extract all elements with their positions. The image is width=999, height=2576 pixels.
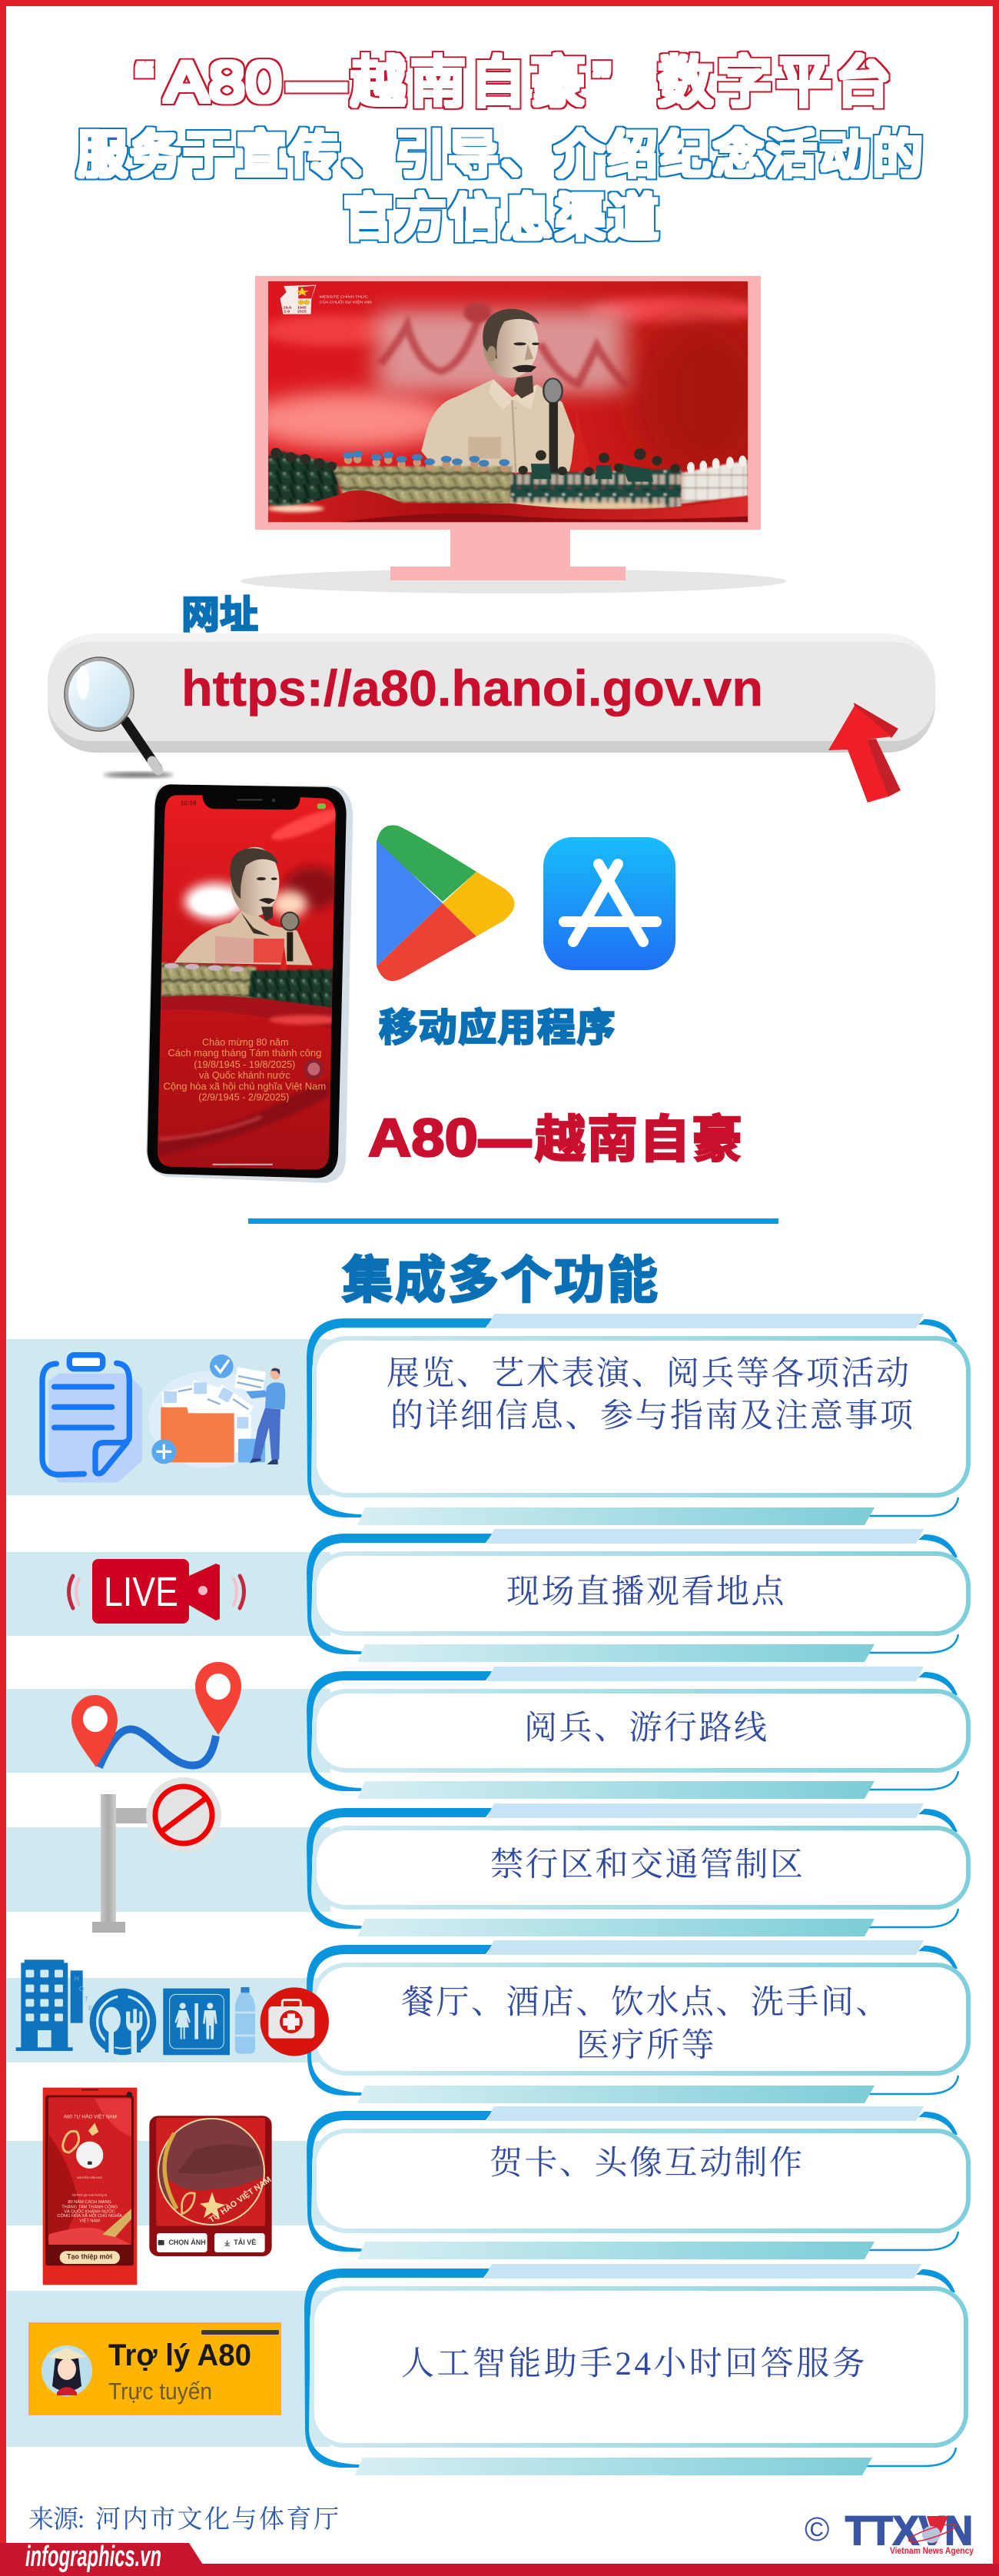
monitor shadow — [241, 569, 786, 593]
panel: feature 4 — [307, 1803, 968, 1936]
panel: feature 5 — [307, 1940, 968, 2103]
icon: red arrow — [828, 703, 901, 803]
footer site name: infographics.vn — [25, 2541, 161, 2573]
chatbot banner — [28, 2322, 281, 2415]
icon: greeting card and avatar screens — [43, 2088, 273, 2285]
greeting card screen: VÀ QUỐC KHÁNH NƯỚC — [64, 2209, 115, 2214]
app name: A80 — [368, 1108, 478, 1168]
feature 5 text: 医疗所等 — [576, 2028, 716, 2064]
A80 logo — [280, 285, 316, 314]
divider — [248, 1218, 778, 1224]
icon: hotel — [16, 1959, 97, 2051]
avatar frame screen: TẢI VỀ — [234, 2238, 256, 2246]
phone screen — [154, 793, 346, 1173]
website caption — [319, 294, 372, 304]
title line 1: ” — [592, 52, 611, 114]
url label: 网址 — [181, 593, 258, 637]
feature 1 text: 展览、艺术表演、阅兵等各项活动 — [387, 1355, 911, 1392]
phone mockup — [146, 784, 353, 1183]
phone screen: 10:58 — [181, 799, 197, 806]
icon: folder illustration — [148, 1354, 285, 1468]
website caption: CỦA CHUỖI SỰ KIỆN A80 — [319, 299, 372, 304]
copyright symbol: © — [805, 2511, 829, 2548]
app name — [368, 1108, 742, 1168]
monitor screen image — [243, 281, 769, 522]
feature 1 text: 的详细信息、参与指南及注意事项 — [390, 1398, 914, 1434]
title line 2: 服务于宣传、引导、介绍纪念活动的 — [77, 126, 925, 183]
icon: hotel: HOTEL — [75, 1975, 97, 2019]
title — [77, 50, 925, 246]
source: 来源: — [28, 2505, 84, 2534]
title line 1: “ — [135, 52, 154, 114]
app name: 越南自豪 — [535, 1111, 742, 1168]
feature row bands — [6, 1339, 330, 2447]
panel: feature 7 — [304, 2264, 966, 2475]
phone screen text: Cộng hòa xã hội chủ nghĩa Việt Nam — [163, 1080, 326, 1092]
feature 3 text: 阅兵、游行路线 — [524, 1710, 768, 1747]
panel: feature 2 — [307, 1529, 968, 1662]
monitor stand — [390, 530, 626, 580]
assistant name: Trợ lý A80 — [108, 2338, 251, 2372]
panel: feature 3 — [307, 1667, 968, 1799]
title line 1: 数字平台 — [658, 52, 891, 114]
greeting card screen — [43, 2088, 137, 2285]
icon: water bottle — [235, 1987, 255, 2054]
title line 1: — — [289, 52, 344, 114]
phone screen text: Cách mạng tháng Tám thành công — [168, 1047, 321, 1059]
icon: first aid — [261, 1987, 329, 2056]
icon: live camera — [69, 1559, 244, 1624]
section heading: 集成多个功能 — [342, 1251, 660, 1308]
phone screen text: và Quốc khánh nước — [199, 1069, 290, 1081]
greeting card screen: Tạo thiệp mời — [67, 2252, 112, 2260]
TTXVN logo: Vietnam News Agency — [890, 2545, 974, 2556]
TTXVN logo: TTXVN — [845, 2508, 973, 2554]
A80 logo: 2025 — [297, 310, 307, 314]
avatar frame screen: CHỌN ẢNH — [168, 2238, 206, 2246]
A80 logo: 1945 — [297, 306, 307, 310]
icon: live camera: LIVE — [104, 1569, 178, 1615]
feature 1 text — [387, 1355, 914, 1434]
greeting card screen: 80 NĂM CÁCH MẠNG — [68, 2199, 111, 2205]
A80 logo: 19-8 — [284, 306, 291, 310]
feature 5 text: 餐厅、酒店、饮水点、洗手间、 — [401, 1985, 891, 2021]
phone screen text: (2/9/1945 - 2/9/2025) — [198, 1091, 289, 1102]
mobile app label: 移动应用程序 — [379, 1006, 616, 1049]
feature 6 text: 贺卡、头像互动制作 — [490, 2145, 804, 2182]
avatar frame screen: TỰ HÀO VIỆT NAM — [207, 2174, 273, 2225]
greeting card screen: A80 TỰ HÀO VIỆT NAM — [64, 2112, 117, 2119]
avatar frame screen — [149, 2116, 273, 2256]
A80 logo: 2-9 — [284, 310, 290, 314]
avatar — [41, 2345, 92, 2396]
url text: https://a80.hanoi.gov.vn — [181, 660, 763, 716]
phone screen text: Chào mừng 80 năm — [202, 1036, 289, 1048]
monitor frame — [255, 276, 761, 530]
greeting card screen: NGUYỄN VĂN HỌC — [77, 2175, 103, 2179]
greeting card screen: VIỆT NAM — [79, 2217, 100, 2223]
icon: restaurant — [90, 1989, 156, 2055]
phone screen text — [163, 1036, 326, 1102]
icon: app store — [543, 837, 675, 970]
icon: google play — [377, 825, 515, 981]
title line 3: 官方信息渠道 — [343, 189, 661, 246]
icon: clipboard — [42, 1355, 142, 1482]
icon: route pins — [71, 1662, 241, 1767]
icon: restroom — [163, 1989, 230, 2055]
title line 1: A80 — [164, 50, 282, 114]
bar body — [48, 633, 935, 753]
online status: Trực tuyến — [108, 2378, 212, 2405]
phone screen text: (19/8/1945 - 19/8/2025) — [194, 1059, 295, 1070]
feature 5 text — [401, 1985, 891, 2064]
feature 7 text: 人工智能助手24小时回答服务 — [401, 2345, 867, 2382]
greeting card screen: CỘNG HÒA XÃ HỘI CHỦ NGHĨA — [57, 2213, 122, 2219]
title line 1 — [135, 50, 891, 114]
feature 4 text: 禁行区和交通管制区 — [490, 1847, 805, 1883]
feature 2 text: 现场直播观看地点 — [506, 1574, 786, 1610]
footer bar — [0, 2543, 999, 2576]
monitor — [241, 276, 786, 593]
website caption: WEBSITE CHÍNH THỨC — [319, 294, 368, 299]
icon: no entry sign — [92, 1777, 221, 1933]
icon: amenities — [16, 1959, 329, 2056]
icon: magnifier — [65, 657, 173, 777]
greeting card screen: Đã tham gia cuộc hưởng về — [72, 2194, 107, 2197]
source: 河内市文化与体育厅 — [95, 2505, 341, 2534]
greeting card screen: THÁNG TÁM THÀNH CÔNG — [61, 2205, 118, 2210]
title line 1: 越南自豪 — [350, 52, 586, 114]
search bar — [48, 633, 935, 753]
panel: feature 1 — [307, 1314, 968, 1525]
app name: — — [480, 1111, 530, 1168]
panel: feature 6 — [307, 2106, 968, 2259]
